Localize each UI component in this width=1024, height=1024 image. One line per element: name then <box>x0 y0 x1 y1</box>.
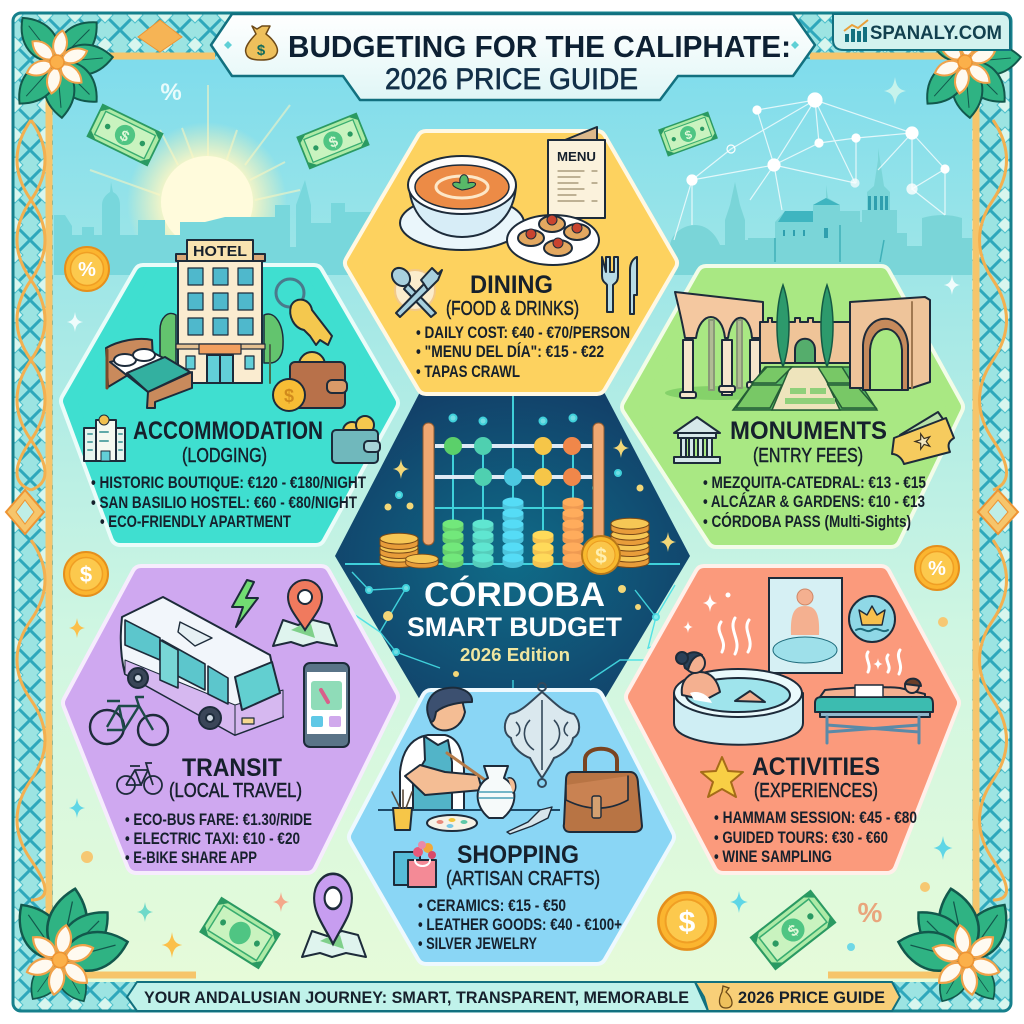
skyline left <box>54 180 372 275</box>
activities heading: ACTIVITIES <box>752 753 880 781</box>
icon: money bag <box>246 26 277 60</box>
illustration: table line <box>378 809 560 811</box>
icon: map pin <box>273 580 337 646</box>
transit subheading: (LOCAL TRAVEL) <box>169 780 302 802</box>
centre hexagon <box>335 392 690 700</box>
activities subheading: (EXPERIENCES) <box>754 780 878 802</box>
illustration: cypress trees <box>777 285 833 367</box>
transit details <box>125 810 312 867</box>
icon: smartphone <box>304 663 349 747</box>
monuments details: • CÓRDOBA PASS (Multi-Sights) <box>703 512 911 531</box>
dining details: • DAILY COST: €40 - €70/PERSON <box>416 323 630 342</box>
dining subheading: (FOOD & DRINKS) <box>446 298 579 320</box>
dining details: • TAPAS CRAWL <box>416 362 520 381</box>
shopping details: • CERAMICS: €15 - €50 <box>418 896 566 915</box>
constellation network <box>674 93 949 240</box>
icon: small money bag <box>719 986 732 1008</box>
illustration: mosque arches <box>675 292 763 398</box>
illustration: hot tub with woman <box>674 652 803 745</box>
illustration: leather handbag <box>564 749 642 832</box>
sparkles <box>683 592 883 670</box>
footer banner <box>127 982 900 1011</box>
money bills and coins scattered: % <box>928 558 946 580</box>
accommodation details: • HISTORIC BOUTIQUE: €120 - €180/NIGHT <box>91 473 366 492</box>
illustration: ceramic vase <box>478 766 516 818</box>
icon: soup bowl <box>400 156 524 250</box>
icon: small bicycle <box>117 763 162 794</box>
title line two: 2026 PRICE GUIDE <box>385 63 638 96</box>
money bills and coins scattered: % <box>78 259 96 281</box>
activities details: • GUIDED TOURS: €30 - €60 <box>714 828 888 847</box>
icon: money bag: $ <box>257 42 266 59</box>
ticket star: ★ <box>911 429 935 455</box>
icon: crossed fork and spoon <box>388 264 442 317</box>
money bills and coins scattered: $ <box>683 127 694 143</box>
icon: lotus badge <box>849 596 895 642</box>
title banner <box>211 14 815 100</box>
monuments heading: MONUMENTS <box>730 417 887 445</box>
shopping subheading: (ARTISAN CRAFTS) <box>446 868 600 890</box>
icon: lightning <box>232 580 258 627</box>
skyline right <box>670 148 972 275</box>
dining details: • "MENU DEL DÍA": €15 - €22 <box>416 342 604 361</box>
panel: dining <box>354 127 668 385</box>
monuments subheading: (ENTRY FEES) <box>753 445 863 467</box>
accommodation subheading: (LODGING) <box>182 445 267 467</box>
transit details: • E-BIKE SHARE APP <box>125 848 257 867</box>
shopping heading: SHOPPING <box>457 841 579 869</box>
wallet coin symbol: $ <box>284 386 294 406</box>
icon: tapas plate <box>507 215 599 265</box>
illustration: artisan <box>400 688 485 810</box>
icon: bed <box>106 339 192 408</box>
brand badge: SPANALY.COM <box>870 23 1002 44</box>
transit details: • ELECTRIC TAXI: €10 - €20 <box>125 829 300 848</box>
icon: small hotel <box>84 415 125 461</box>
monuments details: • ALCÁZAR & GARDENS: €10 - €13 <box>703 492 925 511</box>
money bills and coins scattered: $ <box>80 562 92 587</box>
icon: hotel building <box>160 240 283 383</box>
accommodation details: • SAN BASILIO HOSTEL: €60 - €80/NIGHT <box>91 493 357 512</box>
money bills and coins scattered: $ <box>117 127 132 146</box>
hotel sign: HOTEL <box>193 243 247 260</box>
coin stacks <box>380 518 649 574</box>
brand badge <box>833 14 1010 50</box>
activities details: • WINE SAMPLING <box>714 847 832 866</box>
neon network <box>345 395 680 700</box>
accommodation details: • ECO-FRIENDLY APARTMENT <box>100 512 291 531</box>
icon: small wallet <box>332 416 380 463</box>
illustration: massage table <box>815 679 933 743</box>
money bills and coins scattered <box>64 77 960 969</box>
footer price label: 2026 PRICE GUIDE <box>738 988 885 1007</box>
transit details: • ECO-BUS FARE: €1.30/RIDE <box>125 810 312 829</box>
icon: bicycle <box>90 697 168 745</box>
illustration: paint tools <box>392 790 552 834</box>
sun and rays <box>90 85 300 282</box>
illustration: silver ornament <box>505 683 579 787</box>
transit heading: TRANSIT <box>182 754 282 782</box>
illustration: spa window <box>769 578 842 673</box>
accommodation details <box>91 473 366 531</box>
icon: star <box>701 757 743 797</box>
illustration: garden <box>733 367 877 410</box>
footer slogan: YOUR ANDALUSIAN JOURNEY: SMART, TRANSPARENT, MEMORABLE <box>144 988 689 1007</box>
edition label: 2026 Edition <box>460 645 570 665</box>
monuments details: • MEZQUITA-CATEDRAL: €13 - €15 <box>703 473 926 492</box>
icon: menu card <box>548 127 605 218</box>
icon: wallet and coins <box>273 352 347 411</box>
steam <box>719 618 901 674</box>
shopping details <box>418 896 622 953</box>
shopping details: • LEATHER GOODS: €40 - €100+ <box>418 915 622 934</box>
illustration: fortress wall <box>760 318 850 363</box>
money bills and coins scattered: $ <box>327 133 341 152</box>
activities details <box>714 808 917 866</box>
panel: transit <box>72 575 389 867</box>
activities details: • HAMMAM SESSION: €45 - €80 <box>714 808 917 827</box>
icon: fork and knife <box>602 257 637 314</box>
coin stacks: $ <box>595 545 607 568</box>
icon: key <box>276 279 332 345</box>
money bills and coins scattered: % <box>160 79 182 106</box>
money bills and coins scattered: $ <box>785 922 803 941</box>
panel: activities <box>635 575 950 866</box>
centre panel <box>335 392 690 700</box>
abacus <box>423 423 604 568</box>
icon: shopping bag <box>394 841 436 887</box>
monuments details <box>703 473 926 531</box>
illustration: horseshoe arch <box>850 297 930 390</box>
accommodation heading: ACCOMMODATION <box>133 417 323 445</box>
panel: monuments <box>631 275 954 538</box>
menu label: MENU <box>557 149 596 164</box>
centre heading: CÓRDOBA <box>424 576 605 614</box>
shopping details: • SILVER JEWELRY <box>418 934 537 953</box>
icon: ticket <box>892 412 954 464</box>
title line one: BUDGETING FOR THE CALIPHATE: <box>288 29 791 64</box>
panel: shopping <box>358 683 665 955</box>
centre subheading: SMART BUDGET <box>407 612 622 642</box>
dining heading: DINING <box>470 271 553 299</box>
dining details <box>416 323 630 381</box>
money bills and coins scattered: % <box>858 897 883 928</box>
icon: temple <box>674 417 720 463</box>
money bills and coins scattered: $ <box>679 906 696 939</box>
illustration: bus <box>121 597 283 735</box>
panel: accommodation <box>70 240 389 536</box>
